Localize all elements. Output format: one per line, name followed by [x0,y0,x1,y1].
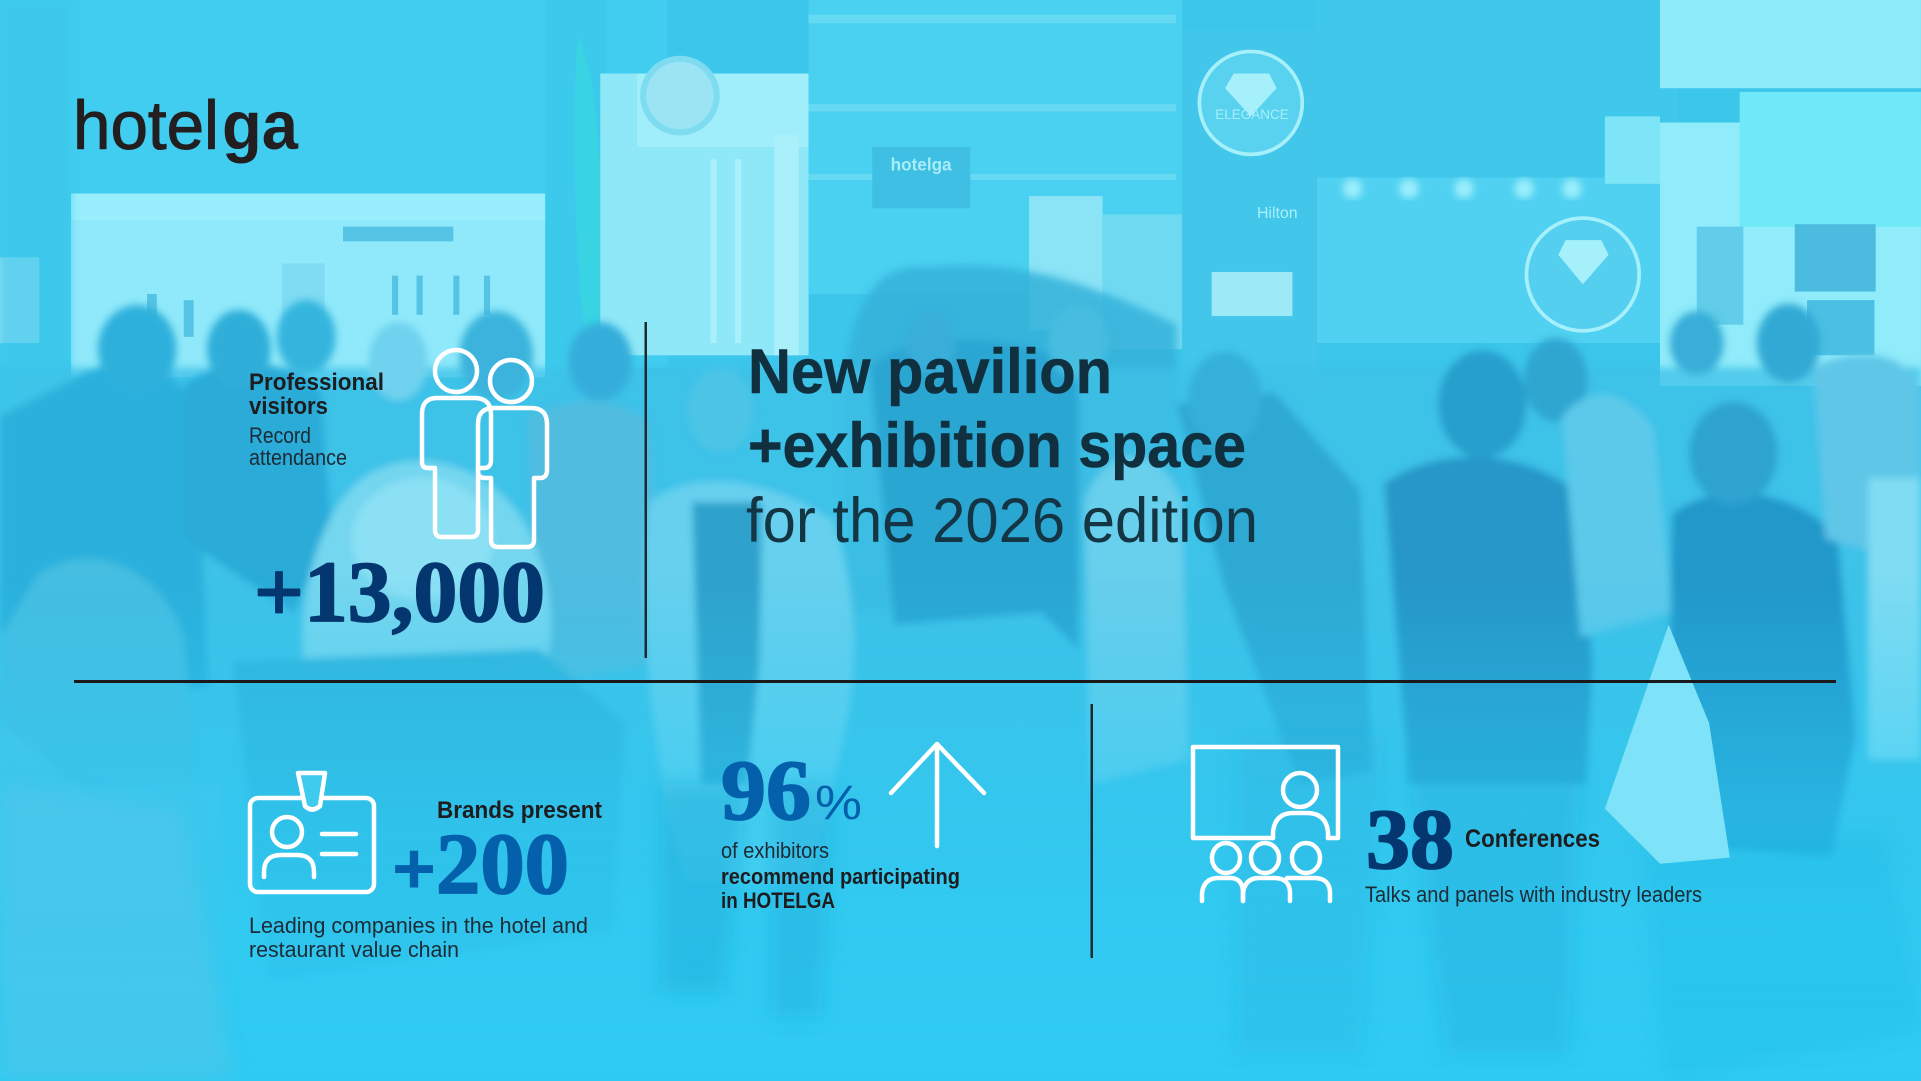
foliage column [545,0,606,380]
text: talks and panels: Talks and panels with industry leaders [1365,882,1702,907]
panel: brands [249,773,602,962]
elegance pillar [1182,31,1317,398]
panel: recommendation [721,742,984,913]
woman and light heads, left [303,461,551,686]
center man with jacket [687,368,753,453]
text: exhibitors recommend: of exhibitors [721,838,829,863]
icon: presenter and audience [1193,747,1338,901]
divider: horizontal [74,680,1836,683]
upper right hall [1317,0,1921,386]
stat: 96%: 96 [721,742,811,838]
text: exhibitors recommend [721,838,960,913]
text: record attendance: Record [249,423,311,448]
label: brands present: Brands present [437,797,602,824]
panel: conferences [1193,747,1702,907]
ceiling trusses [809,0,1182,349]
logo: hotelga [73,87,299,164]
crowd far [845,265,1176,613]
text: record attendance [249,423,347,470]
text: exhibitors recommend: recommend participating [721,864,960,889]
wall top left [0,0,668,368]
stat: 38: 38 [1366,791,1454,887]
text: leading companies [249,913,588,962]
stat: 96%: % [815,777,862,830]
heading: new pavilion [746,337,1258,556]
label: conferences: Conferences [1465,825,1600,853]
heading: professional visitors [249,369,384,420]
right dark men [1384,457,1593,784]
heading: new pavilion: +exhibition space [748,411,1246,481]
heading: new pavilion: for the 2026 edition [746,486,1258,556]
ceiling trusses: hotelga [891,154,952,174]
icon: id badge [250,773,374,892]
text: exhibitors recommend: in HOTELGA [721,888,835,913]
stat: +13,000: +13,000 [254,543,545,640]
elegance pillar: Hilton [1257,205,1298,222]
divider: vertical top [644,322,647,658]
icon: two people [422,350,547,547]
shop display [0,194,546,377]
text: leading companies: Leading companies in the hotel and [249,913,588,938]
lower subtle figures [0,735,1921,1081]
left group [0,363,208,723]
logo: hotelga: hotel [73,87,219,164]
divider: vertical bottom [1090,704,1093,958]
heading: professional visitors: visitors [249,393,328,420]
stat: +200: + [392,829,436,909]
icon: up arrow [891,744,984,846]
elegance pillar: ELEGANCE [1215,107,1289,122]
heading: professional visitors: Professional [249,369,384,396]
text: leading companies: restaurant value chain [249,937,459,962]
logo: hotelga: ga [222,87,299,164]
panel: professional visitors [249,350,547,640]
heading: new pavilion: New pavilion [748,337,1112,407]
shopping bag [1605,625,1730,864]
stat: 96% [721,742,862,838]
booth with logo [600,59,809,355]
stat: +200: 200 [436,815,569,912]
text: record attendance: attendance [249,445,347,470]
mid crowd dark [870,340,1078,649]
fade to cyan [0,576,1921,1081]
